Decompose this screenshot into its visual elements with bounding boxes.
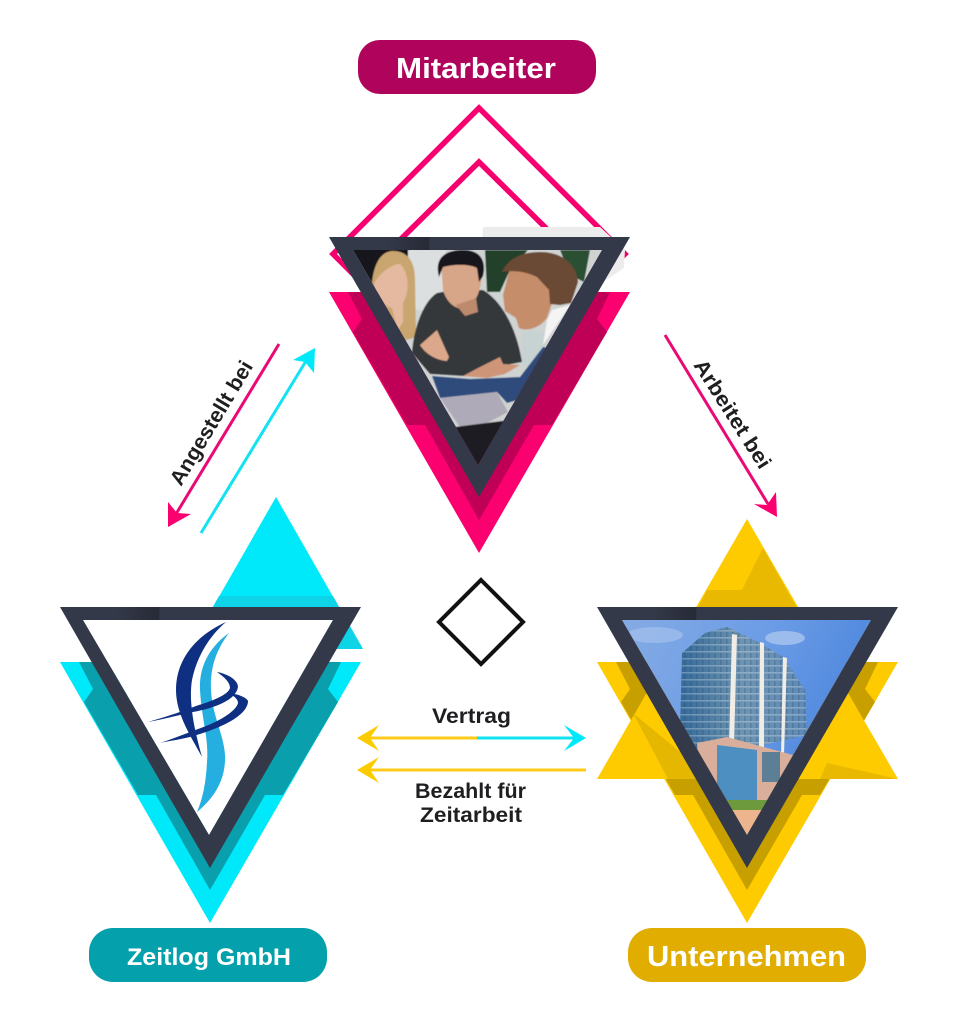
cyan triangle xyxy=(60,662,361,923)
arrow: cyan up xyxy=(201,348,315,533)
pill: Mitarbeiter: Mitarbeiter xyxy=(396,53,556,85)
dark yellow inner shape xyxy=(616,662,878,890)
label: Bezahlt für Zeitarbeit: Bezahlt für xyxy=(415,780,526,803)
label: Vertrag: Vertrag xyxy=(432,705,511,728)
dark triangle frame xyxy=(597,607,898,868)
pill: Zeitlog GmbH: Zeitlog GmbH xyxy=(127,944,291,971)
grey shadow shape xyxy=(480,227,625,280)
dark pink inner shape xyxy=(348,292,610,520)
pill: Zeitlog GmbH xyxy=(89,928,327,982)
pill: Mitarbeiter xyxy=(358,40,596,94)
panel: Zeitlog GmbH xyxy=(60,497,363,982)
photo: three colleagues xyxy=(350,248,606,468)
yellow upward triangle xyxy=(597,519,898,779)
panel: Mitarbeiter xyxy=(329,40,630,553)
decorative diamonds xyxy=(333,108,625,400)
dark triangle frame xyxy=(329,237,630,497)
panel: Unternehmen xyxy=(597,519,898,982)
teal inner shape xyxy=(79,662,341,890)
arrow: Angestellt bei (pink) xyxy=(168,344,279,527)
arrow: Arbeitet bei (pink) xyxy=(665,335,777,517)
arrow: Bezahlt xyxy=(357,757,586,783)
logo: Zeitlog xyxy=(148,622,248,812)
photo: office tower xyxy=(620,618,874,840)
arrow: Vertrag double xyxy=(357,725,586,751)
label: Arbeitet bei: Arbeitet bei xyxy=(689,355,775,473)
yellow triangle xyxy=(597,662,898,923)
dark triangle frame xyxy=(60,607,361,868)
label: Bezahlt für Zeitarbeit xyxy=(415,780,526,827)
pale cyan upward triangle xyxy=(189,497,363,649)
center diamond xyxy=(439,580,523,664)
pill: Unternehmen xyxy=(628,928,866,982)
pill: Unternehmen: Unternehmen xyxy=(647,941,846,973)
logo panel xyxy=(83,620,333,835)
label: Bezahlt für Zeitarbeit: Zeitarbeit xyxy=(420,804,522,827)
label: Angestellt bei: Angestellt bei xyxy=(166,357,258,490)
pink triangle xyxy=(329,292,630,553)
